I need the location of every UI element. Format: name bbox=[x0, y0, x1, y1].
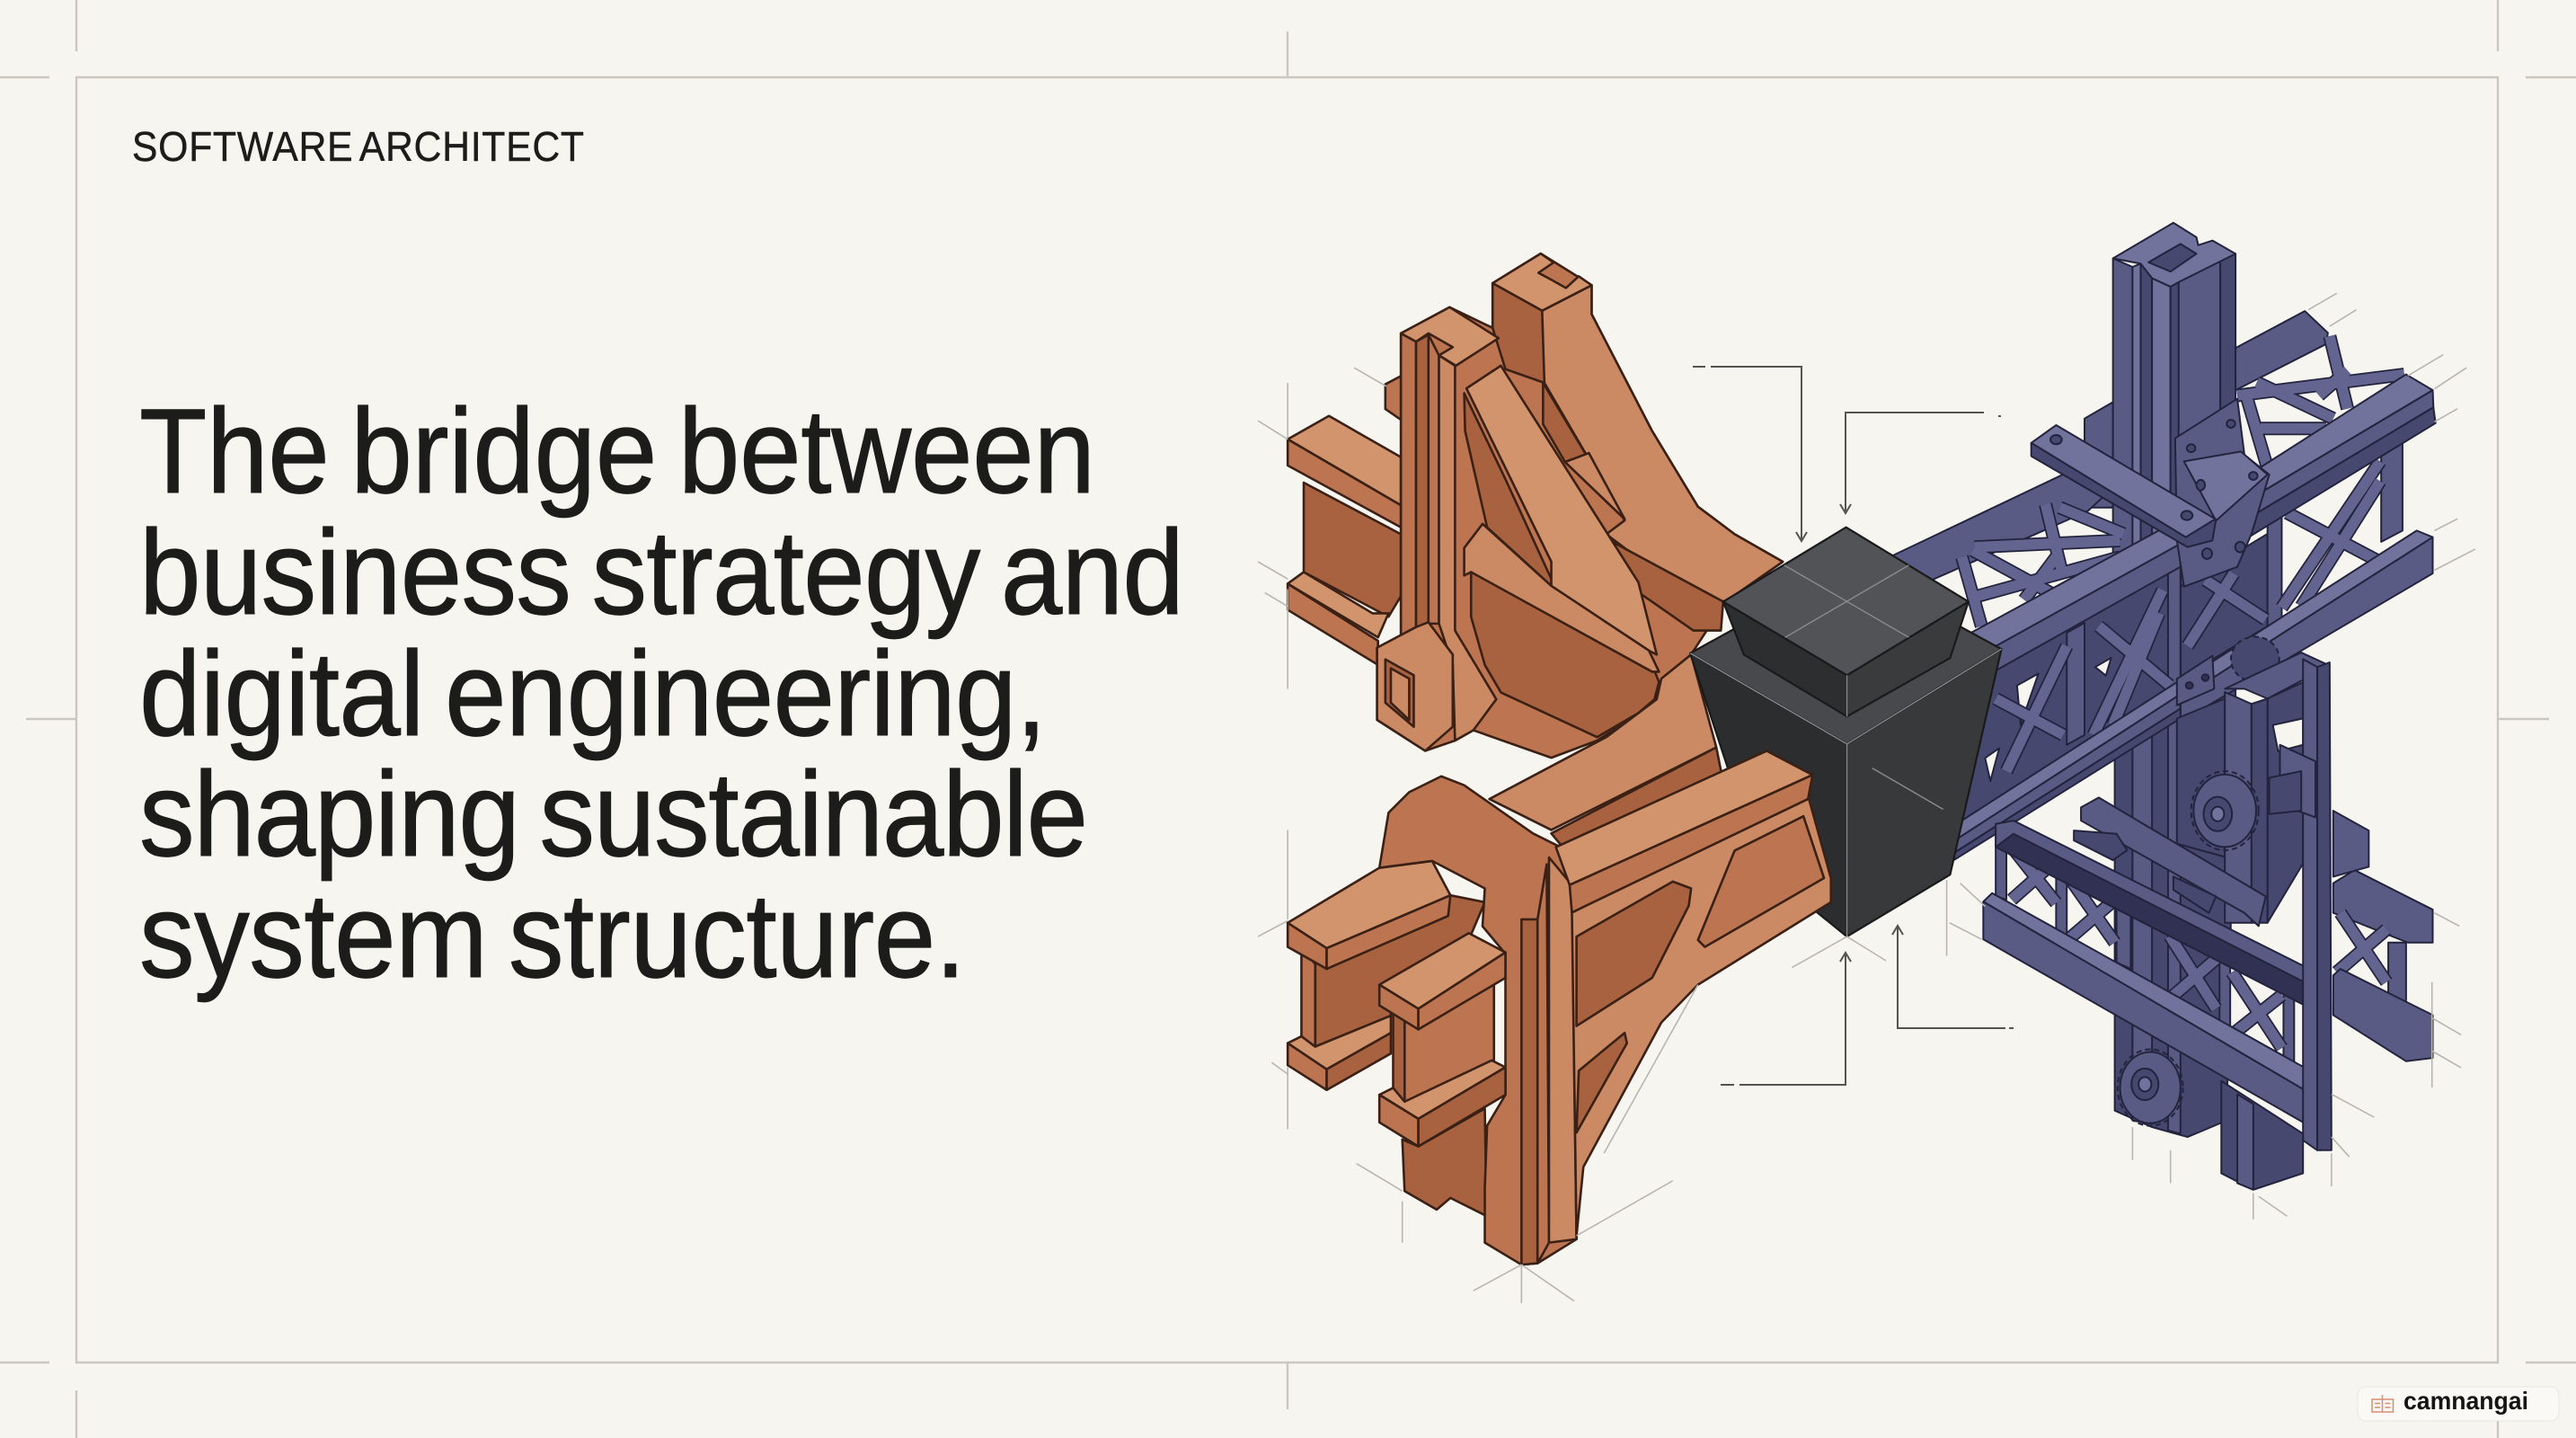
arrow: top left callout bbox=[1693, 367, 1807, 541]
column strips bbox=[1401, 307, 1499, 741]
rear stub bbox=[1385, 376, 1403, 421]
gear upper bbox=[2191, 771, 2259, 850]
diagonal brace bbox=[1465, 366, 1657, 654]
recessed plate panel bbox=[1471, 572, 1659, 737]
arrow: bottom left callout bbox=[1721, 953, 1851, 1085]
upper left I-beam bbox=[1288, 416, 1401, 665]
upper copper silhouette bbox=[1377, 253, 1783, 758]
eyebrow label: SOFTWARE ARCHITECT bbox=[132, 125, 584, 170]
headline bbox=[139, 384, 1184, 1003]
arrow: bottom right callout bbox=[1892, 926, 2014, 1028]
navy front lower chord bbox=[1953, 656, 2214, 860]
navy connector plate and bolts bbox=[2032, 399, 2270, 587]
navy left back chord bbox=[1886, 469, 2113, 601]
navy left back bracing bbox=[1962, 504, 2124, 626]
arrow: top right callout bbox=[1840, 413, 2001, 513]
illustration: copper business strategy structure, front part bbox=[1288, 750, 1831, 1265]
headline: shaping sustainable bbox=[139, 747, 1088, 882]
navy lower right beams bbox=[2333, 811, 2433, 1061]
navy lower front rail bbox=[1983, 893, 2323, 1131]
block light edges bbox=[1690, 565, 2002, 936]
navy upper column bbox=[2085, 223, 2235, 567]
navy machine frame uprights bbox=[2221, 636, 2332, 1190]
illustration: copper business strategy structure, rear part bbox=[1288, 253, 1783, 861]
central black connector block bbox=[1690, 528, 2002, 936]
foot box with opening bbox=[1377, 622, 1453, 750]
navy back bracing bbox=[2237, 336, 2404, 468]
icon: open book bbox=[2372, 1395, 2394, 1412]
badge text: camnangai bbox=[2403, 1387, 2528, 1415]
navy sliding rail bbox=[2074, 797, 2266, 926]
headline: business strategy and bbox=[139, 505, 1184, 640]
navy left truss web panel bbox=[1957, 560, 2181, 824]
headline: system structure. bbox=[139, 868, 966, 1003]
headline: digital engineering, bbox=[139, 626, 1047, 761]
navy right truss verticals and diagonals bbox=[2181, 443, 2403, 679]
navy lower chord running through bbox=[2181, 530, 2433, 722]
navy back upper-right chord bbox=[2235, 311, 2328, 390]
lower base bbox=[1403, 1108, 1487, 1243]
watermark badge bbox=[2358, 1387, 2559, 1421]
rear arm and post bbox=[1492, 253, 1783, 631]
navy lower truss verticals and bracing bbox=[1996, 827, 2294, 1074]
gear lower bbox=[2118, 1050, 2183, 1126]
badge background bbox=[2358, 1387, 2559, 1421]
central beam bbox=[1490, 654, 1722, 861]
navy left front chord bbox=[1910, 520, 2181, 718]
illustration: navy digital engineering truss bbox=[1886, 223, 2436, 1190]
navy upper chord running through bbox=[2177, 375, 2436, 579]
ledge bbox=[1465, 524, 1659, 671]
rear fork beam bbox=[1288, 861, 1485, 1090]
front plate bbox=[1379, 777, 1577, 1265]
construction lines around copper structure bbox=[1258, 368, 1886, 1303]
right I-beam and gusset bbox=[1556, 750, 1831, 1236]
front fork beam bbox=[1379, 933, 1506, 1147]
callout arrows pointing at connector block bbox=[1693, 367, 2014, 1085]
navy upper front rail bbox=[1996, 821, 2323, 1012]
block lower body bbox=[1690, 624, 2002, 936]
navy rear column lower bbox=[2115, 554, 2235, 1137]
navy mid mechanics bbox=[2177, 698, 2225, 857]
construction lines around navy structure bbox=[1947, 293, 2475, 1220]
headline: The bridge between bbox=[139, 384, 1095, 519]
block upper cap bbox=[1723, 528, 1969, 716]
